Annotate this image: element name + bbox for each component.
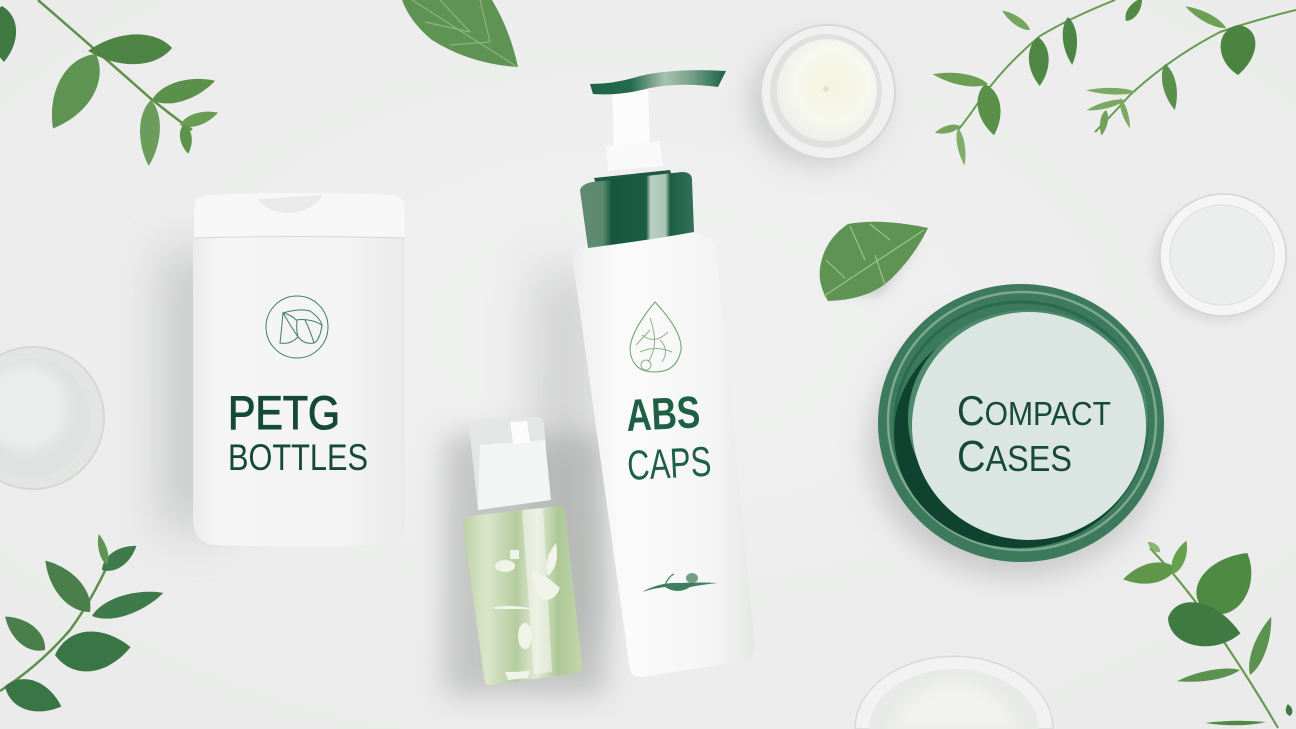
cap notch: [258, 195, 323, 213]
soft shadows: [160, 40, 1282, 695]
bottle body: [573, 232, 755, 677]
sprig: top right 1: [932, 0, 1146, 166]
sprig: top left: [0, 0, 220, 166]
leaf: centre: [820, 222, 928, 301]
case face: [912, 312, 1146, 540]
panel: small serum bottle: [463, 417, 582, 685]
icon: sprig mark: [642, 573, 717, 592]
case title: COMPACT: [957, 387, 1111, 434]
sprig: top right 2: [1086, 2, 1296, 136]
case title: [957, 387, 1111, 481]
bottle body: [193, 236, 405, 546]
icon: leaf emblem: [266, 296, 328, 358]
bottle glass: [463, 506, 582, 685]
jar: top: [761, 25, 895, 159]
pump stem: [612, 84, 650, 150]
lid: top right: [1160, 194, 1286, 316]
clear overcap: [469, 417, 550, 510]
jar: bottom: [855, 656, 1053, 729]
white pump: [478, 440, 551, 510]
sprig: bottom right: [1121, 538, 1293, 728]
case title: CASES: [957, 432, 1072, 481]
central dip tube: [522, 508, 552, 674]
leaf: top centre: [402, 0, 518, 67]
icon: drop emblem: [630, 302, 681, 372]
pump head: [590, 70, 726, 94]
pump collar: [606, 141, 663, 171]
panel: ABS pump bottle: [573, 70, 755, 677]
liquid flecks: [493, 543, 560, 680]
label: Bottles: BOTTLES: [228, 437, 368, 478]
heading: ABS: ABS: [625, 386, 701, 441]
heading: PETG: PETG: [228, 386, 340, 439]
jar: left edge: [0, 347, 104, 489]
sprig: bottom left: [0, 533, 166, 720]
label: Caps: CAPS: [626, 438, 712, 489]
green cap: [580, 172, 694, 248]
panel: PETG bottle: [193, 193, 405, 546]
green neck ring: [594, 170, 672, 184]
panel: compact case: [878, 284, 1164, 562]
bottle flip cap: [194, 193, 405, 238]
outer green rim: [878, 284, 1164, 562]
